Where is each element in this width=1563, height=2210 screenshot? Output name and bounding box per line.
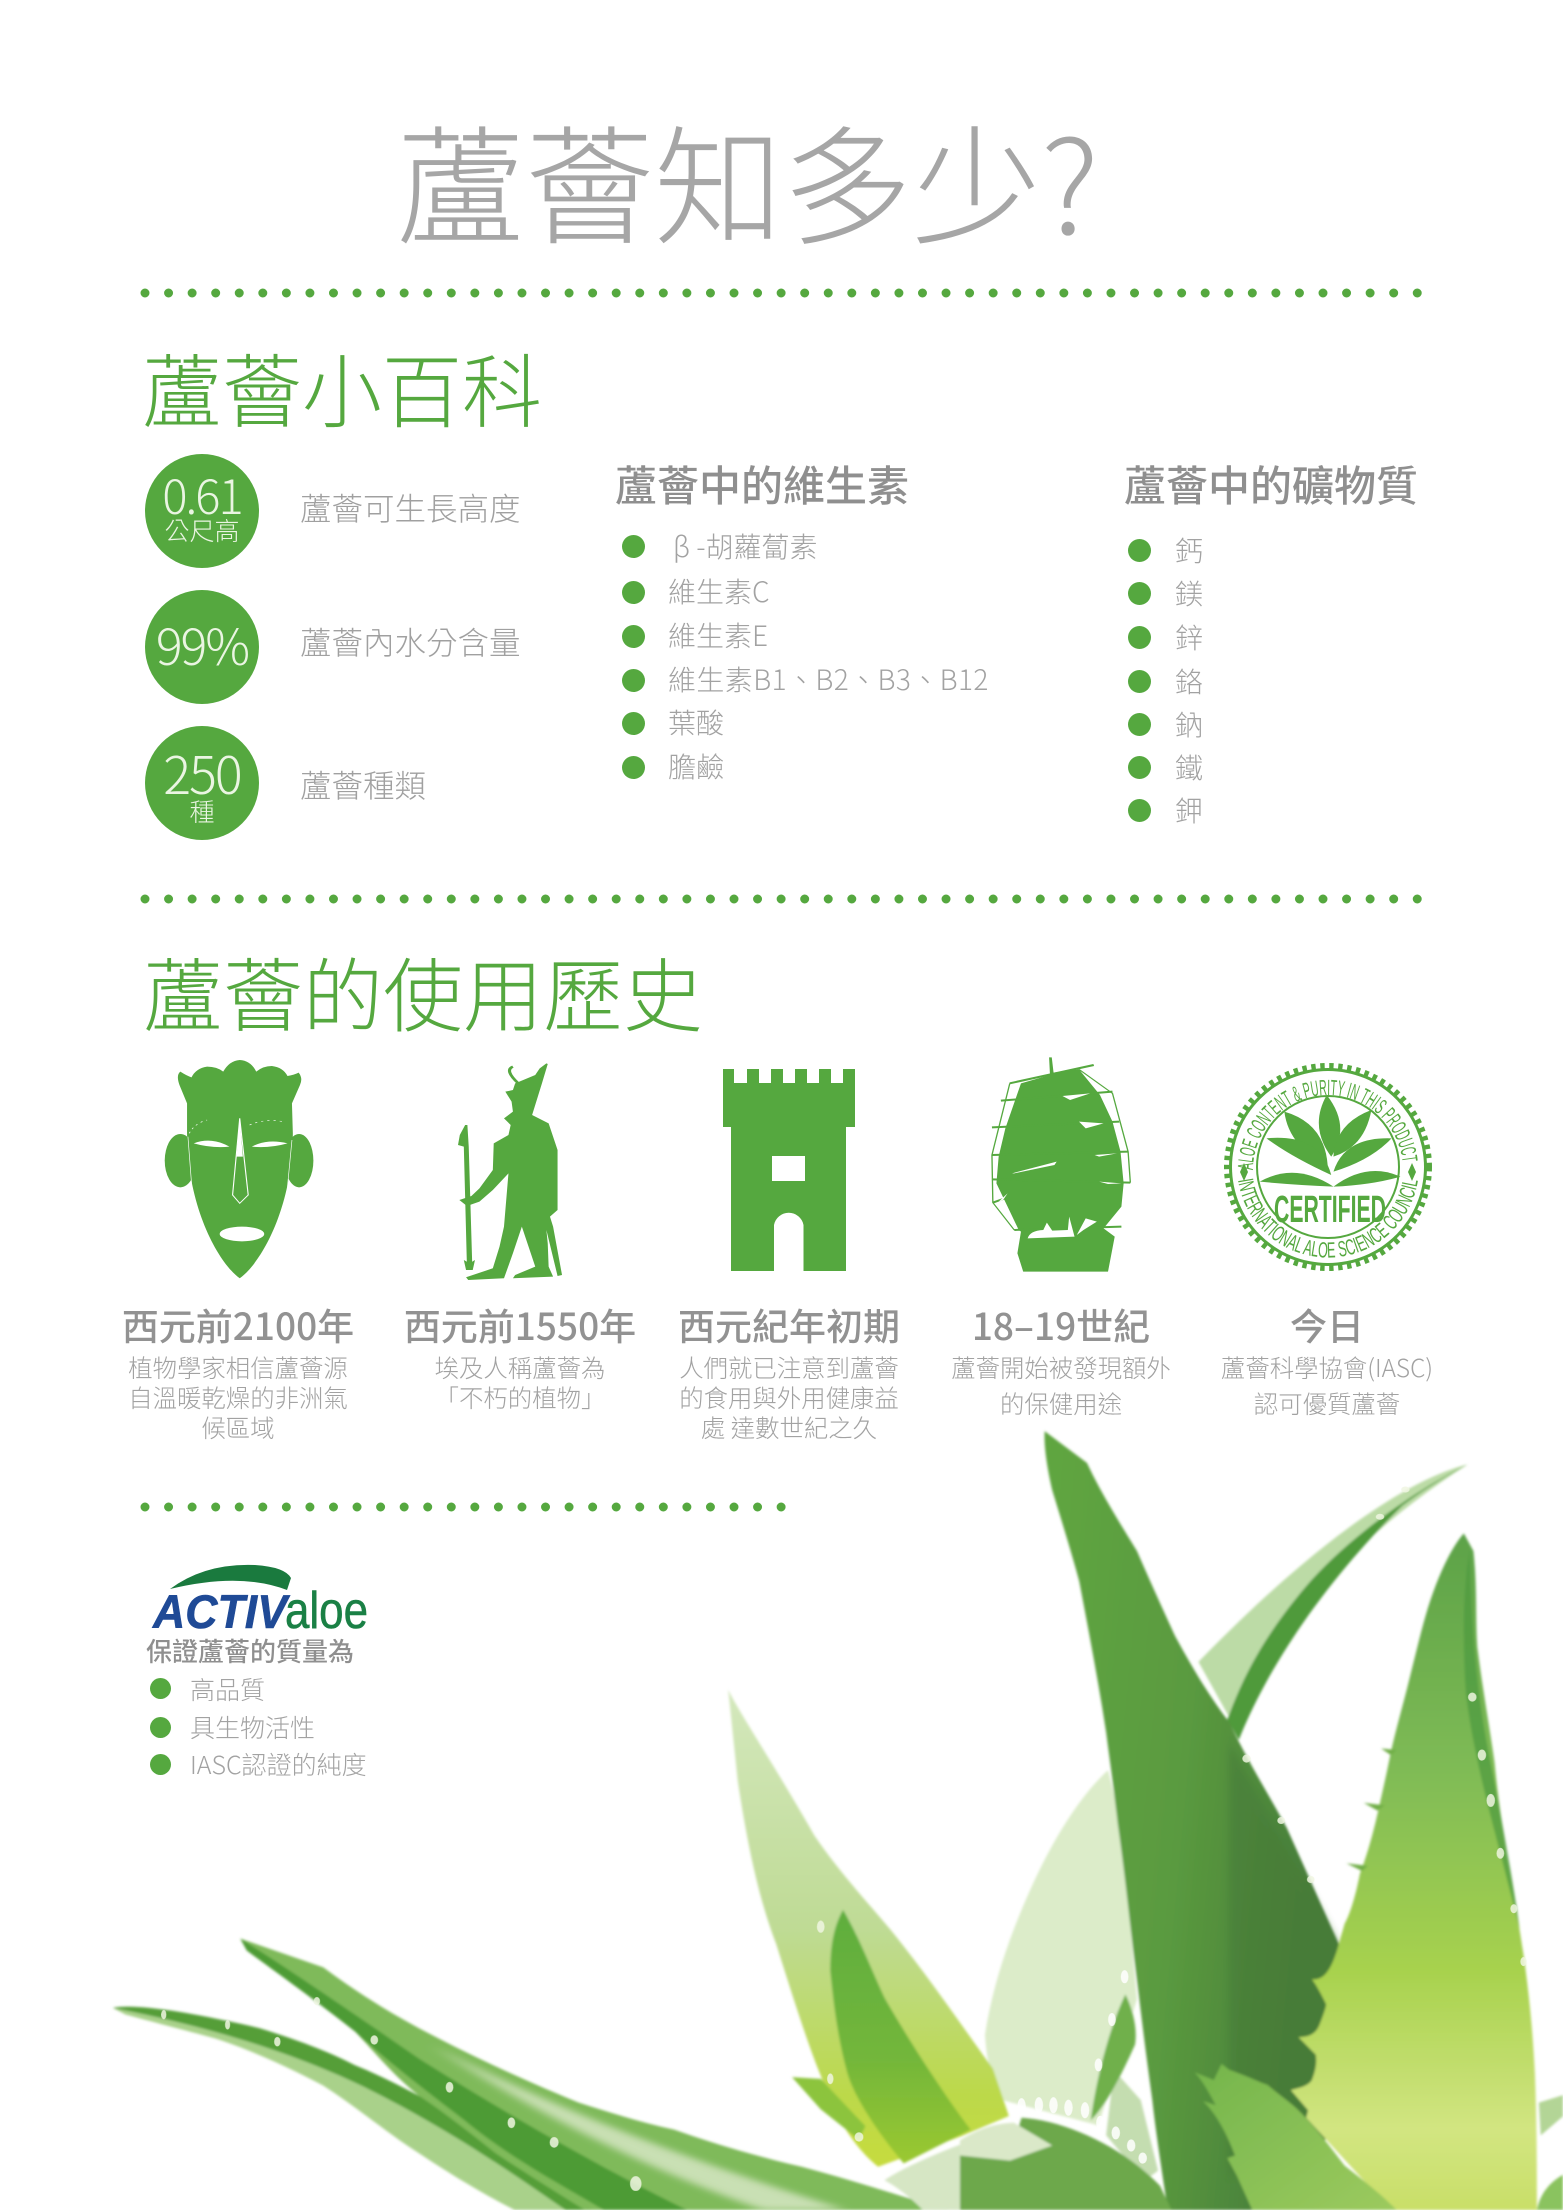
stat: species [145, 726, 259, 840]
ACTIValoe list: IASC認證的純度 [190, 1746, 367, 1782]
minerals list: 鐵 [1175, 747, 1203, 787]
timeline item 4 [951, 1297, 1171, 1421]
vitamins list: 膽鹼 [668, 746, 724, 786]
minerals list: 鈉 [1175, 704, 1203, 744]
leaf: thin back pale [985, 1464, 1468, 2181]
leaf: white spines [161, 1487, 1527, 2191]
vitamins list: 維生素E [668, 615, 768, 655]
leaf: back pale large [985, 1770, 1137, 2125]
timeline item 1: 西元前2100年 [122, 1297, 354, 1351]
leaf: center curl base [974, 2146, 1100, 2210]
icon: sailing ship [992, 1057, 1130, 1272]
icon: IASC certified seal: INTERNATIONAL ALOE SCIENCE COUNCIL [1238, 1178, 1418, 1258]
timeline item 1: 自溫暖乾燥的非洲氣 [128, 1380, 348, 1415]
logo: ACTIValoe: aloe [285, 1582, 368, 1640]
vitamins list: 維生素B1、B2、B3、B12 [668, 659, 989, 699]
leaf: center pale and lime [728, 1690, 1009, 2167]
timeline item 5: 蘆薈科學協會(IASC) [1221, 1350, 1433, 1385]
vitamins list [622, 526, 989, 786]
timeline item 5: 今日 [1290, 1297, 1364, 1351]
timeline item 5: 認可優質蘆薈 [1254, 1386, 1400, 1421]
stat: water: 99% [156, 608, 248, 680]
icon: african mask [165, 1060, 313, 1278]
timeline item 3: 人們就已注意到蘆薈 [679, 1350, 899, 1385]
heading: history: 蘆薈的使用歷史 [143, 933, 703, 1049]
leaf: low left far [113, 1939, 1100, 2210]
ACTIValoe list: 具生物活性 [190, 1709, 315, 1745]
logo: ACTIValoe: ACTIV [152, 1585, 290, 1638]
minerals list: 鎂 [1175, 573, 1203, 613]
leaf: center curl [960, 2064, 1563, 2210]
leaf: center inner [830, 1910, 971, 2163]
stat: height [145, 454, 259, 568]
leaf: low left large [240, 1939, 948, 2210]
timeline item 4: 18–19世紀 [972, 1297, 1150, 1351]
timeline item 2: 「不朽的植物」 [435, 1380, 605, 1415]
stat: height: 公尺高 [164, 512, 240, 548]
stat: water [145, 590, 259, 704]
timeline item 3: 西元紀年初期 [678, 1297, 900, 1351]
title: 蘆薈知多少? [396, 85, 1099, 272]
stat: height: 0.61 [162, 459, 242, 528]
heading: minerals: 蘆薈中的礦物質 [1124, 453, 1418, 514]
timeline item 4: 蘆薈開始被發現額外 [951, 1350, 1171, 1385]
minerals list: 鉻 [1175, 661, 1203, 701]
timeline item 2 [404, 1297, 636, 1415]
leaf: front small [1195, 2064, 1397, 2210]
timeline item 1: 候區域 [201, 1410, 275, 1445]
stat label: species: 蘆薈種類 [300, 761, 426, 807]
timeline item 5 [1221, 1297, 1433, 1421]
ACTIValoe list: 高品質 [190, 1671, 265, 1707]
stat label: height: 蘆薈可生長高度 [300, 484, 521, 530]
vitamins list: β -胡蘿蔔素 [673, 526, 818, 566]
timeline item 2: 埃及人稱蘆薈為 [435, 1350, 605, 1385]
leaf: main dark [1044, 1431, 1537, 2210]
vitamins list: 葉酸 [668, 702, 724, 742]
ACTIValoe list [150, 1671, 367, 1782]
timeline item 3: 的食用與外用健康益 [679, 1380, 899, 1415]
stat: species: 250 [163, 734, 241, 809]
icon: castle tower [723, 1069, 855, 1271]
timeline item 1: 植物學家相信蘆薈源 [128, 1350, 348, 1385]
timeline item 1 [122, 1297, 354, 1445]
minerals list: 鉀 [1175, 790, 1203, 830]
icon: IASC certified seal [1224, 1063, 1432, 1271]
leaf: right slivers [1539, 2095, 1563, 2135]
stat: species: 種 [189, 793, 214, 829]
minerals list: 鈣 [1175, 530, 1203, 570]
timeline item 2: 西元前1550年 [404, 1297, 636, 1351]
icon: IASC certified seal: CERTIFIED [1274, 1189, 1386, 1231]
timeline item 4: 的保健用途 [1000, 1386, 1122, 1421]
leaf: center curl pale [884, 2126, 1054, 2210]
ACTIValoe heading: 保證蘆薈的質量為 [146, 1632, 354, 1669]
icon: egyptian figure [458, 1063, 562, 1280]
minerals list: 鋅 [1175, 617, 1203, 657]
timeline item 3: 處 達數世紀之久 [701, 1410, 877, 1445]
vitamins list: 維生素C [668, 571, 770, 611]
stat label: water: 蘆薈內水分含量 [300, 618, 521, 664]
heading: vitamins: 蘆薈中的維生素 [615, 453, 909, 514]
leaf: right bright [1291, 1533, 1537, 2210]
heading: aloe encyclopedia: 蘆薈小百科 [142, 329, 542, 445]
icon: IASC certified seal: ALOE CONTENT & PURITY IN THIS PRODUCT [1238, 1080, 1418, 1170]
timeline item 3 [678, 1297, 900, 1445]
minerals list [1128, 530, 1203, 830]
